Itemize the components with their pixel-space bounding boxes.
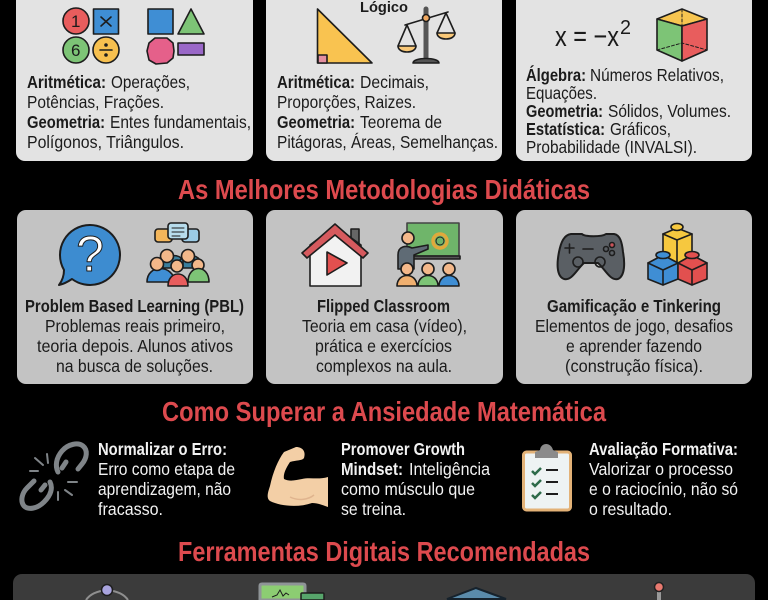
icon: right triangle [318, 9, 372, 63]
text: normalize mistakes description: Normalizar o Erro: [98, 439, 227, 459]
icon: joystick [654, 582, 664, 600]
panel: 7th grade curriculum [266, 0, 502, 161]
formula: x = -x squared: 2 [620, 17, 631, 39]
text: algebra, geometry and statistics topics: Números Relativos, [590, 65, 724, 85]
icon: broken chain [22, 444, 86, 508]
text: normalize mistakes description: fracasso. [98, 499, 163, 519]
text: flipped classroom description: prática e exercícios [315, 336, 452, 356]
text: arithmetic and geometry topics [277, 72, 498, 152]
text: algebra, geometry and statistics topics: Sólidos, Volumes. [608, 101, 731, 121]
text: normalize mistakes description: Erro como etapa de [98, 459, 235, 479]
text: algebra, geometry and statistics topics [526, 64, 731, 157]
text: algebra, geometry and statistics topics: Probabilidade (INVALSI). [526, 137, 697, 157]
icon: clipboard checklist [524, 444, 570, 510]
text: PBL description [25, 296, 244, 376]
text: formative assessment description: e o raciocínio, não só [589, 479, 738, 499]
panel: Flipped Classroom [266, 210, 503, 384]
icon: flexed arm [268, 447, 328, 507]
text: arithmetic and geometry topics: Entes fundamentais, [110, 112, 251, 132]
text: flipped classroom description: Flipped Classroom [317, 296, 450, 316]
icon: arithmetic symbols [63, 8, 119, 63]
item: growth mindset [268, 439, 490, 519]
icon: building blocks [648, 224, 707, 285]
text: arithmetic and geometry topics: Pitágoras, Áreas, Semelhanças. [277, 132, 498, 152]
text: arithmetic and geometry topics: Geometria: [27, 112, 105, 132]
text: formative assessment description: o resultado. [589, 499, 672, 519]
icon: screens with chart [260, 584, 324, 600]
text: arithmetic and geometry topics: Aritmética: [277, 72, 355, 92]
text: arithmetic and geometry topics: Geometria: [277, 112, 355, 132]
text: algebra, geometry and statistics topics: Geometria: [526, 101, 603, 121]
icon: teacher at board with students [397, 223, 460, 286]
text: PBL description: teoria depois. Alunos ativos [37, 336, 233, 356]
text: PBL description: Problemas reais primeiro, [45, 316, 225, 336]
text: gamification description: Elementos de jogo, desafios [535, 316, 733, 336]
text: gamification description: (construção física). [565, 356, 703, 376]
panel: 6th grade curriculum [16, 0, 253, 161]
panel: 8th grade curriculum [516, 0, 752, 161]
text: growth mindset description: se treina. [341, 499, 406, 519]
icon: geometric shapes [147, 9, 204, 64]
text: normalize mistakes description: aprendizagem, não [98, 479, 231, 499]
panel: Gamification and Tinkering [516, 210, 752, 384]
text: algebra, geometry and statistics topics: Equações. [526, 83, 597, 103]
text: flipped classroom description [302, 296, 467, 376]
text: gamification description: Gamificação e Tinkering [547, 296, 721, 316]
icon: shield roof [447, 588, 506, 599]
text: flipped classroom description: complexos na aula. [316, 356, 452, 376]
panel: digital tools [13, 574, 755, 600]
text: flipped classroom description: Teoria em casa (vídeo), [302, 316, 467, 336]
text: arithmetic and geometry topics: Operações, [111, 72, 190, 92]
text: formative assessment description: Valorizar o processo [589, 459, 733, 479]
text: PBL description: Problem Based Learning (PBL) [25, 296, 244, 316]
text: arithmetic and geometry topics: Aritmética: [27, 72, 106, 92]
icon: arithmetic symbols: 6 [71, 41, 80, 60]
text: gamification description: e aprender fazendo [566, 336, 702, 356]
text: arithmetic and geometry topics: Teorema de [360, 112, 442, 132]
item: formative assessment [524, 439, 738, 519]
text: arithmetic and geometry topics: Potências, Frações. [27, 92, 164, 112]
text: arithmetic and geometry topics: Polígonos, Triângulos. [27, 132, 184, 152]
icon: game controller [558, 234, 624, 279]
text: normalize mistakes description [98, 439, 235, 519]
icon: question speech bubble [59, 225, 120, 285]
text: formative assessment description: Avaliação Formativa: [589, 439, 738, 459]
formula: x = -x squared: x = −x [555, 21, 619, 53]
item: normalize mistakes [22, 439, 235, 519]
panel: Problem Based Learning [17, 210, 253, 384]
text: arithmetic and geometry topics: Decimais, [360, 72, 429, 92]
icon: GeoGebra circle [86, 584, 128, 600]
text: PBL description: na busca de soluções. [56, 356, 213, 376]
icon: arithmetic symbols: 1 [71, 12, 80, 31]
text: algebra, geometry and statistics topics: Gráficos, [610, 119, 671, 139]
icon: discussion group [147, 223, 209, 286]
text: growth mindset description: Promover Growth [341, 439, 465, 459]
heading: recommended digital tools: Ferramentas Digitais Recomendadas [178, 536, 590, 567]
text: algebra, geometry and statistics topics: Estatística: [526, 119, 605, 139]
text: arithmetic and geometry topics: Proporções, Raizes. [277, 92, 416, 112]
icon: balance scale [398, 9, 455, 63]
heading: best methodologies: As Melhores Metodologias Didáticas [178, 174, 590, 205]
icon: cube [657, 9, 707, 61]
text: arithmetic and geometry topics [27, 72, 251, 152]
icon: house with play button [302, 224, 368, 286]
text: growth mindset description: como músculo que [341, 479, 475, 499]
text: growth mindset description [341, 439, 490, 519]
text: formative assessment description [589, 439, 738, 519]
heading: overcoming math anxiety: Como Superar a Ansiedade Matemática [162, 396, 606, 427]
icon: question speech bubble: ? [76, 226, 104, 282]
text: gamification description [535, 296, 733, 376]
text: growth mindset description: Mindset: [341, 459, 403, 479]
text: growth mindset description: Inteligência [409, 459, 490, 479]
text: algebra, geometry and statistics topics: Álgebra: [526, 64, 586, 85]
